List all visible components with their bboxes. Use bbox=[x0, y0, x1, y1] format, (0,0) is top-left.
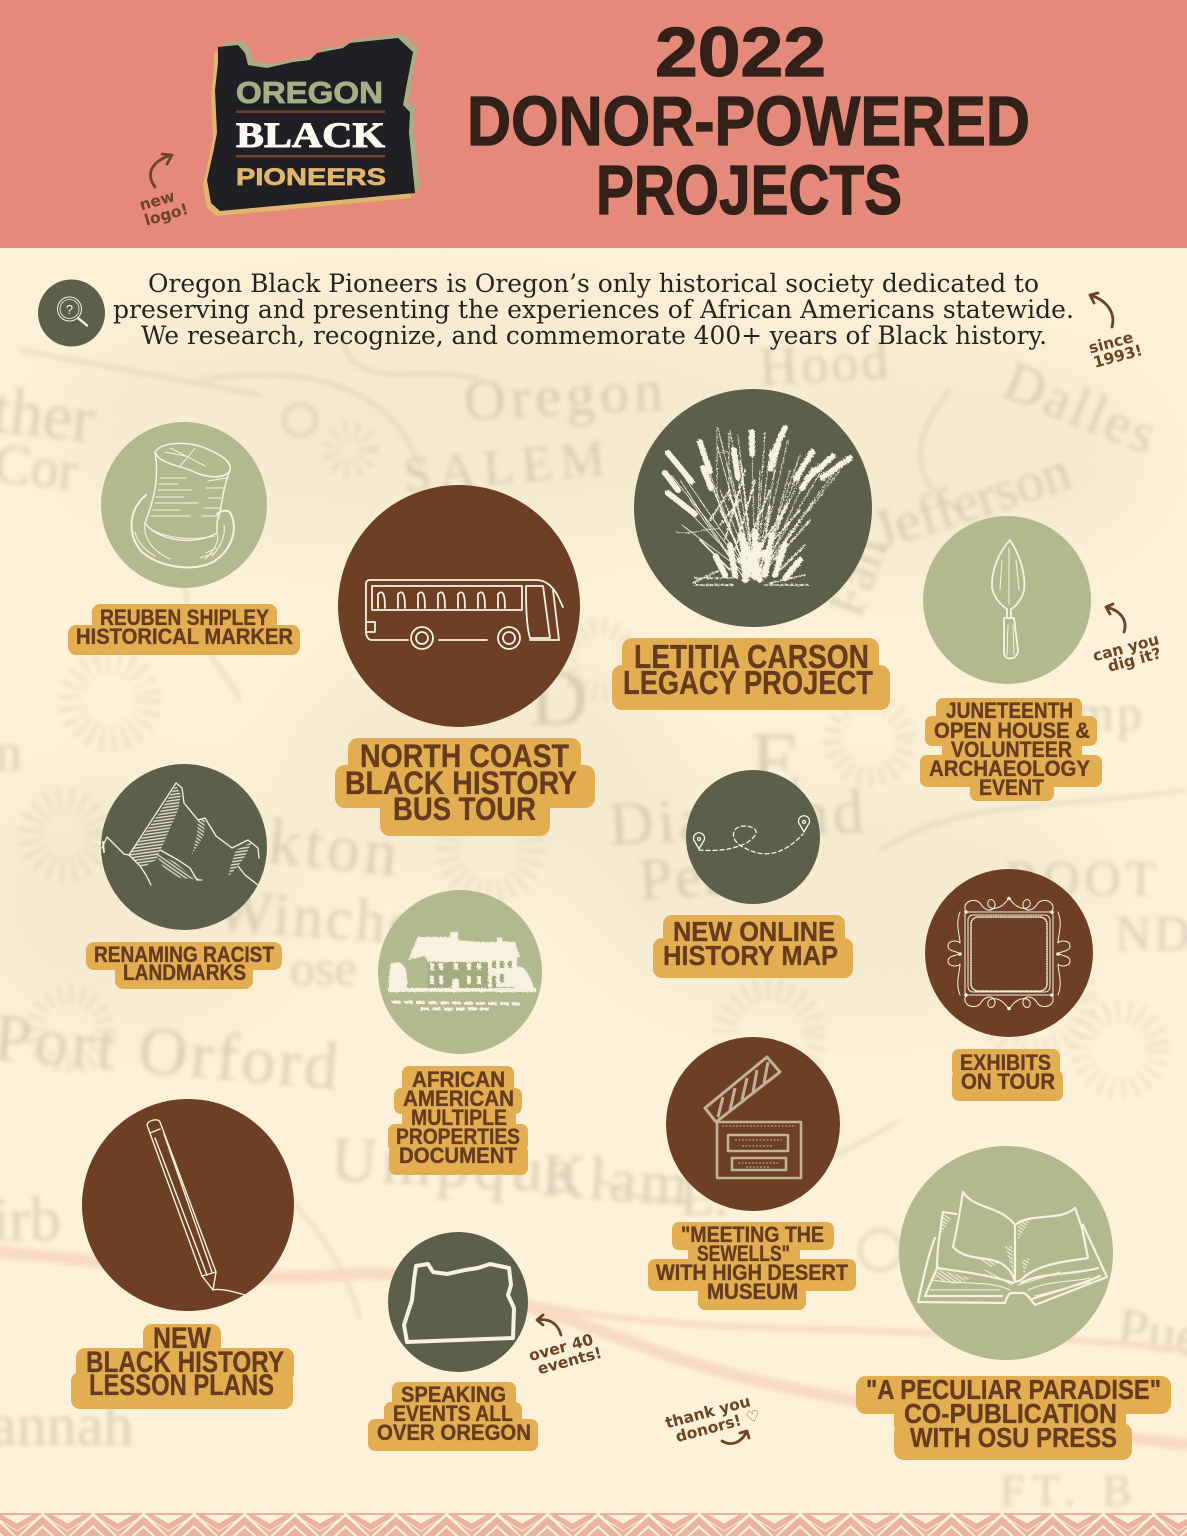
label bbox=[368, 1382, 538, 1451]
project: exhibits on tour bbox=[925, 869, 1093, 1101]
project: North Coast bus tour bbox=[335, 485, 595, 836]
label: AFRICAN bbox=[412, 1067, 505, 1092]
background: blurred antique map: D bbox=[530, 655, 588, 743]
background: blurred antique map: Elkton bbox=[198, 797, 405, 891]
project: renaming racist landmarks bbox=[86, 764, 282, 989]
label bbox=[71, 1322, 294, 1409]
project: new Black history lesson plans bbox=[71, 1099, 294, 1409]
icon: top hat bbox=[101, 422, 267, 588]
background: blurred antique map: Fall bbox=[818, 529, 899, 624]
icon: Oregon outline bbox=[388, 1232, 528, 1372]
label: LEGACY PROJECT bbox=[623, 664, 873, 701]
note: since 1993 bbox=[1087, 293, 1144, 372]
label: OVER OREGON bbox=[377, 1420, 531, 1445]
title bbox=[467, 13, 1030, 229]
project: Reuben Shipley historical marker bbox=[68, 422, 300, 655]
label: BUS TOUR bbox=[393, 791, 536, 827]
label: WITH OSU PRESS bbox=[910, 1422, 1117, 1453]
label: REUBEN SHIPLEY bbox=[100, 605, 269, 630]
label: NORTH COAST bbox=[360, 738, 569, 774]
icon: ornate frame bbox=[925, 869, 1093, 1037]
label: SPEAKING bbox=[401, 1382, 506, 1407]
background: blurred antique map: E bbox=[750, 716, 801, 809]
icon: bus bbox=[338, 485, 580, 727]
label: NEW bbox=[153, 1322, 212, 1355]
title: 2022 bbox=[655, 13, 826, 91]
background: blurred antique map: Winche bbox=[214, 877, 420, 957]
label bbox=[388, 1066, 528, 1175]
title: DONOR-POWERED bbox=[467, 82, 1030, 160]
background: blurred antique map: ose bbox=[290, 940, 357, 996]
note: new logo: logo! bbox=[142, 200, 190, 230]
label bbox=[856, 1374, 1171, 1460]
logo: Oregon Black Pioneers: OREGON bbox=[236, 75, 383, 110]
note: new logo bbox=[137, 154, 190, 230]
icon: magnifying glass bbox=[38, 280, 105, 346]
label: "MEETING THE bbox=[681, 1222, 824, 1247]
background: blurred antique map: FT. B bbox=[1000, 1466, 1139, 1515]
header band bbox=[0, 0, 1187, 248]
label: HISTORY MAP bbox=[663, 940, 838, 971]
icon: farmhouse bbox=[378, 890, 542, 1054]
background: blurred antique map: Oregon bbox=[462, 357, 669, 433]
label: PROPERTIES bbox=[396, 1124, 520, 1149]
background: blurred antique map: mp bbox=[1075, 685, 1145, 741]
note: thank you donors: donors! ♡ bbox=[674, 1406, 762, 1446]
background: blurred antique map: SALEM bbox=[401, 429, 615, 503]
icon: trowel bbox=[923, 516, 1091, 684]
label: NEW ONLINE bbox=[673, 916, 835, 947]
label bbox=[648, 1222, 856, 1310]
note: new logo: new bbox=[137, 187, 177, 214]
icon: clapperboard bbox=[666, 1037, 840, 1211]
label: SEWELLS" bbox=[697, 1241, 790, 1266]
label: EVENTS ALL bbox=[393, 1401, 513, 1426]
icon: open book bbox=[899, 1146, 1113, 1360]
label: WITH HIGH DESERT bbox=[656, 1260, 848, 1285]
label: VOLUNTEER bbox=[951, 737, 1072, 762]
label bbox=[653, 915, 853, 978]
icon: map route bbox=[686, 770, 820, 904]
project: new online history map bbox=[653, 770, 853, 978]
logo: Oregon Black Pioneers: PIONEERS bbox=[236, 164, 386, 191]
background: blurred antique map: Jefferson bbox=[865, 440, 1078, 562]
label: EVENT bbox=[979, 775, 1044, 800]
note: thank you donors bbox=[663, 1391, 762, 1448]
label bbox=[68, 604, 300, 655]
note: since 1993: 1993! bbox=[1091, 341, 1144, 372]
project: Letitia Carson legacy project bbox=[612, 389, 890, 710]
logo: Oregon Black Pioneers: BLACK bbox=[236, 115, 385, 155]
label: RENAMING RACIST bbox=[94, 942, 274, 967]
label: BLACK HISTORY bbox=[86, 1346, 284, 1379]
label: LANDMARKS bbox=[123, 960, 246, 985]
note: since 1993: since bbox=[1087, 328, 1135, 357]
label bbox=[920, 698, 1102, 801]
background: blurred antique map: Hood bbox=[757, 330, 892, 397]
note: thank you donors: thank you bbox=[663, 1392, 752, 1432]
title: PROJECTS bbox=[596, 151, 902, 229]
label: CO-PUBLICATION bbox=[904, 1398, 1117, 1429]
note: over 40 events bbox=[527, 1315, 604, 1379]
label bbox=[612, 638, 890, 710]
label: JUNETEENTH bbox=[946, 698, 1073, 723]
background: blurred antique map: Diamond bbox=[607, 778, 869, 859]
label: ON TOUR bbox=[961, 1069, 1055, 1094]
background: blurred antique map: Port Orford bbox=[0, 999, 344, 1105]
label: DOCUMENT bbox=[399, 1143, 518, 1168]
label: EXHIBITS bbox=[960, 1050, 1051, 1075]
label: HISTORICAL MARKER bbox=[76, 624, 293, 649]
note: can you dig it: dig it? bbox=[1106, 644, 1163, 676]
background: blurred antique map: Dalles bbox=[995, 350, 1168, 467]
project: Juneteenth open house bbox=[920, 516, 1102, 801]
label: LESSON PLANS bbox=[89, 1369, 274, 1402]
intro paragraph: preserving and presenting the experiences of African Americans statewide. bbox=[113, 295, 1074, 324]
label: ARCHAEOLOGY bbox=[929, 756, 1090, 781]
intro paragraph bbox=[113, 269, 1074, 350]
label: AMERICAN bbox=[403, 1086, 514, 1111]
label bbox=[952, 1049, 1063, 1101]
label: LETITIA CARSON bbox=[634, 638, 869, 675]
project: speaking events all over Oregon bbox=[368, 1232, 538, 1451]
background: blurred antique map: ROOT bbox=[1005, 850, 1161, 906]
note: over 40 events: over 40 bbox=[527, 1331, 595, 1365]
label: BLACK HISTORY bbox=[345, 765, 577, 801]
background: blurred antique map: Peak bbox=[636, 838, 769, 913]
background: blurred antique map: L. bbox=[680, 1166, 728, 1228]
note: can you dig it: can you bbox=[1091, 630, 1161, 665]
label: MUSEUM bbox=[707, 1279, 798, 1304]
background: blurred antique map: Klam bbox=[539, 1141, 693, 1219]
icon: mountains bbox=[101, 764, 267, 930]
note: over 40 events: events! bbox=[536, 1344, 604, 1378]
project: A Peculiar Paradise co-publication bbox=[856, 1146, 1171, 1460]
icon: magnifying glass: ? bbox=[66, 302, 73, 317]
intro paragraph: Oregon Black Pioneers is Oregon’s only historical society dedicated to bbox=[148, 269, 1039, 298]
background: blurred antique map: Umpqua bbox=[329, 1123, 583, 1207]
bottom zigzag border bbox=[0, 1512, 1187, 1536]
label: OPEN HOUSE & bbox=[934, 718, 1090, 743]
intro paragraph: We research, recognize, and commemorate 400+ years of Black history. bbox=[141, 321, 1047, 350]
label bbox=[335, 738, 595, 836]
project: Meeting the Sewells bbox=[648, 1037, 856, 1310]
note: can you dig it bbox=[1091, 604, 1165, 679]
logo: Oregon Black Pioneers bbox=[203, 34, 420, 216]
icon: grass tuft bbox=[634, 389, 872, 627]
label: MULTIPLE bbox=[411, 1105, 507, 1130]
icon: pencil bbox=[82, 1099, 294, 1311]
label bbox=[86, 942, 282, 989]
project: African American multiple properties document bbox=[378, 890, 542, 1175]
